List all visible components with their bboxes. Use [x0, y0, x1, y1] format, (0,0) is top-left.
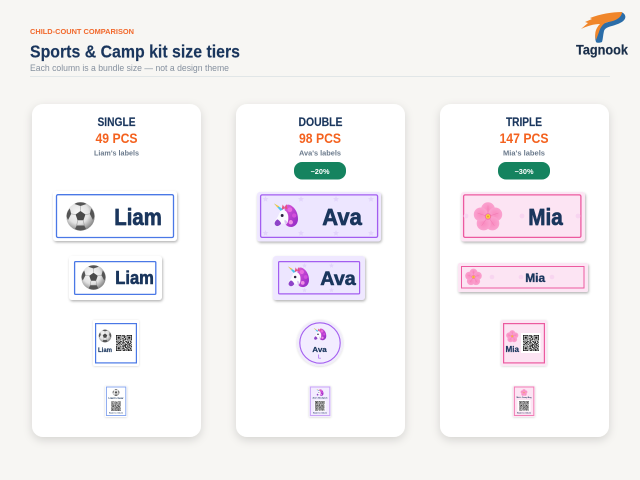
label: tag Liam with QR: Liam's Gear: [108, 397, 124, 400]
label: medium rectangle Ava: [273, 256, 365, 300]
label: tag Liam with QR: [105, 386, 127, 417]
panel: triple: [440, 104, 609, 437]
logo mark: [581, 12, 625, 43]
label: tag Mia with QR: Mia's Camp Bag: [516, 397, 532, 399]
panel: double: [236, 104, 405, 437]
label: tag Ava with QR: [309, 386, 331, 417]
label: tag Ava with QR: Ava's Backpack: [312, 396, 328, 400]
owner caption: Ava's labels: [299, 148, 341, 158]
label: tag Mia with QR: Scan to return: [517, 412, 532, 414]
discount badge: −20%: [310, 169, 330, 176]
piece count: 49 PCS: [96, 130, 138, 146]
panel: single: [32, 104, 201, 437]
logo: Tagnook: [576, 12, 628, 58]
title: Sports & Camp kit size tiers: [30, 42, 240, 62]
tier name: TRIPLE: [506, 117, 542, 129]
label: tag Liam with QR: Scan to return: [109, 412, 124, 414]
label: square Liam with QR: [93, 320, 139, 366]
discount badge: [498, 162, 550, 180]
label: large rectangle Liam: [53, 191, 177, 241]
subtitle: Each column is a bundle size — not a design theme: [30, 63, 229, 74]
discount badge: −30%: [514, 169, 534, 176]
owner caption: Mia's labels: [503, 148, 545, 158]
label: square Mia with QR: [501, 320, 547, 366]
label: medium rectangle Liam: [69, 256, 162, 300]
label: tag Mia with QR: [513, 386, 535, 417]
logo wordmark: Tagnook: [576, 42, 628, 58]
eyebrow: CHILD-COUNT COMPARISON: [30, 27, 134, 36]
label: square Liam with QR: Liam: [98, 347, 112, 354]
tier name: SINGLE: [98, 117, 136, 129]
label: medium rectangle Liam: Liam: [115, 268, 154, 288]
owner caption: Liam's labels: [94, 148, 139, 158]
discount badge: [294, 162, 346, 180]
label: round Ava: [297, 320, 343, 366]
label: large rectangle Liam: Liam: [114, 204, 162, 230]
label: round Ava: L: [318, 354, 321, 360]
label: slim rectangle Mia: [458, 263, 588, 292]
label: tag Ava with QR: Scan to return: [313, 412, 328, 414]
tier name: DOUBLE: [298, 117, 343, 129]
label: large rectangle Mia: [461, 192, 585, 242]
piece count: 147 PCS: [500, 130, 548, 146]
label: large rectangle Mia: Mia: [528, 204, 563, 230]
header: [30, 27, 240, 74]
piece count: 98 PCS: [299, 130, 341, 146]
label: large rectangle Ava: Ava: [322, 204, 362, 230]
label: large rectangle Ava: [257, 192, 381, 242]
label: medium rectangle Ava: Ava: [320, 269, 356, 290]
label: round Ava: Ava: [312, 345, 328, 354]
label: square Mia with QR: Mia: [506, 345, 520, 354]
label: slim rectangle Mia: Mia: [525, 271, 546, 285]
